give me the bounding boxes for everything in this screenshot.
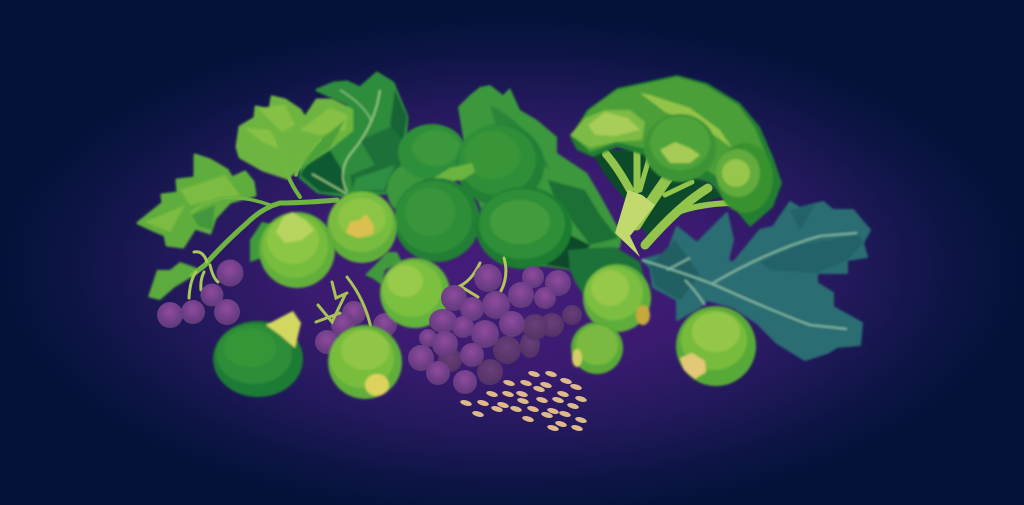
green ball: centre <box>380 258 450 328</box>
berries: left group <box>157 260 244 328</box>
cabbage heads: centre <box>387 124 572 269</box>
parsley: left sprig <box>138 155 255 247</box>
green ball: lower centre-left <box>328 325 402 399</box>
small grape cluster: centre left <box>315 277 397 354</box>
kale leaf: top centre-left <box>300 73 407 196</box>
green ball: right lower <box>676 306 756 386</box>
grape stems <box>460 258 506 297</box>
large grape cluster: centre <box>408 258 582 394</box>
broccoli shadow <box>590 150 725 240</box>
teal leaf: right <box>642 202 870 360</box>
green ball: small <box>571 322 623 374</box>
cabbage leaves: behind heads <box>458 85 645 297</box>
broccoli crown <box>570 75 782 227</box>
faded grapes <box>438 305 582 385</box>
small sprig leaf: under green ball <box>250 222 402 285</box>
seeds <box>460 370 587 432</box>
broccoli stems <box>606 152 730 245</box>
green ball: upper left with pale top <box>259 212 335 288</box>
dark green cut ball: lower left <box>213 311 303 397</box>
green ball: right upper <box>583 264 651 332</box>
broccoli stem base <box>615 190 655 257</box>
parsley: lower small sprig <box>148 262 197 300</box>
green ball: by stem with yellow core <box>327 191 397 263</box>
stems of parsley <box>189 133 337 298</box>
parsley: upper sprig <box>237 97 352 178</box>
broccoli <box>570 75 782 257</box>
bright grapes <box>408 264 571 394</box>
